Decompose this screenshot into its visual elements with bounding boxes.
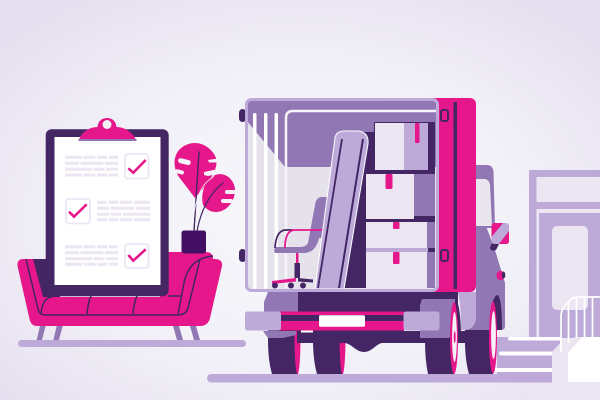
sofa back	[30, 252, 213, 300]
indicator light	[496, 271, 505, 280]
checklist text lines 1	[65, 157, 118, 175]
front steps	[495, 337, 562, 375]
sofa legs	[35, 326, 202, 347]
mid purple side pieces	[263, 292, 455, 338]
plant leaf small	[202, 174, 235, 212]
cab body and front fender	[458, 226, 505, 374]
door stripes	[253, 113, 278, 289]
cargo box interior	[246, 99, 438, 291]
clip	[78, 118, 136, 141]
box second	[366, 174, 435, 219]
chassis	[296, 292, 458, 313]
sofa front	[17, 256, 222, 347]
truck	[239, 98, 509, 374]
plant	[175, 143, 236, 254]
ground line: truck	[207, 374, 557, 382]
wheel second	[313, 302, 346, 374]
door hinges	[239, 109, 246, 262]
checkbox 3	[125, 244, 148, 268]
sofa body	[17, 259, 222, 326]
plant leaf large	[175, 143, 216, 198]
checklist text lines 3	[65, 247, 118, 264]
ground line: sofa	[18, 340, 246, 347]
checklist text lines 2	[97, 202, 150, 220]
cab	[470, 165, 495, 228]
mattress	[315, 131, 368, 289]
office chair	[272, 197, 332, 288]
clipboard on sofa scene	[17, 118, 236, 347]
sofa cushions	[41, 297, 183, 314]
cargo frame	[246, 100, 438, 290]
vase	[182, 230, 206, 254]
third wheel rim	[450, 302, 458, 374]
box third	[366, 222, 435, 251]
box fourth	[366, 248, 435, 288]
sofa outlines	[26, 256, 213, 315]
license plate	[319, 315, 365, 327]
wheel rear left	[268, 302, 300, 374]
truck side pink panel	[420, 98, 476, 292]
box top	[374, 122, 435, 171]
checkbox 2	[66, 199, 90, 224]
wheels	[268, 296, 493, 374]
building	[529, 170, 600, 338]
moving boxes	[366, 122, 435, 288]
axle	[297, 331, 467, 352]
stair and railing	[530, 297, 600, 400]
side mirror	[490, 223, 509, 251]
paper	[54, 137, 160, 285]
bumper	[245, 312, 440, 331]
wheel fourth	[465, 328, 493, 374]
clipboard board	[46, 129, 169, 296]
dark rear wall	[330, 122, 435, 288]
checkbox 1	[125, 154, 148, 178]
wheel third	[425, 296, 461, 374]
